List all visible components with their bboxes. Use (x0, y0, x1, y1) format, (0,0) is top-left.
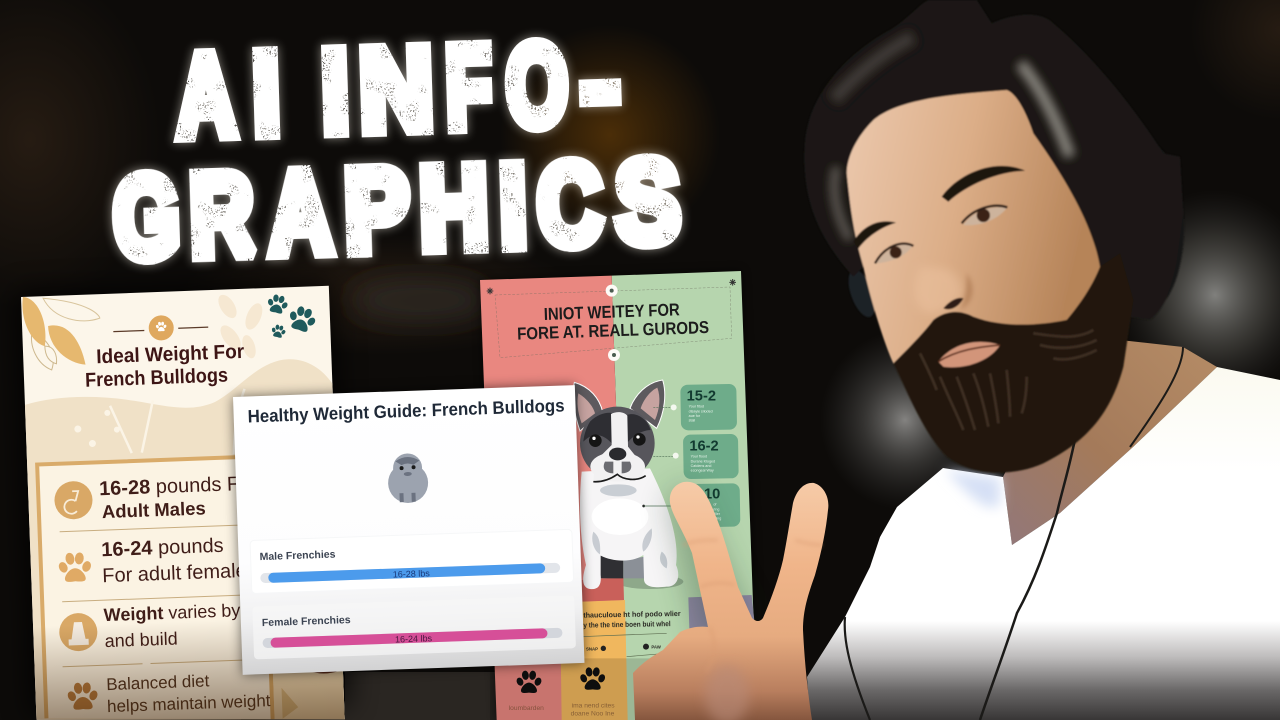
headline line 1: O (504, 20, 570, 152)
faint leaves top right (214, 290, 268, 361)
headline line 2: H (418, 142, 490, 274)
range bar: female (262, 628, 563, 649)
headline (112, 18, 682, 283)
range bar: female: 16-24 lbs (395, 633, 433, 644)
weight callout 1: stall (689, 419, 695, 423)
chest markings (600, 484, 637, 496)
title: Ideal Weight For (96, 341, 245, 368)
headline line 2: I (498, 141, 528, 271)
headline line 2: S (614, 136, 682, 268)
headline line 1: F (444, 22, 493, 153)
poster background (15, 279, 350, 717)
fact: weight varies: Weight varies by 4 (103, 600, 256, 625)
face (847, 90, 1100, 367)
fact: balanced diet: Balanced diet (106, 671, 210, 694)
purple tab (688, 595, 755, 628)
description text (580, 609, 681, 657)
neck (1003, 340, 1217, 545)
finger joints and knuckle shading (683, 540, 822, 672)
title (84, 341, 246, 392)
header icon with rules (113, 314, 209, 342)
green half (612, 271, 760, 720)
eyes (877, 245, 912, 263)
ears (573, 382, 603, 431)
side panel (273, 663, 345, 720)
card: healthy weight guide (233, 385, 584, 675)
fact: adult males: 16-28 pounds For (99, 472, 258, 500)
paw icons (515, 667, 606, 693)
weight callout 1: disayie siloded (689, 409, 713, 413)
presenter (804, 0, 1280, 720)
weight callout 1: Your fitod (689, 405, 704, 409)
headline line 2: A (267, 146, 334, 278)
right headphone cup (1109, 142, 1184, 312)
fact: adult females: 16-24 pounds (101, 535, 224, 561)
headline line 1: I (320, 26, 351, 156)
label: female: Female Frenchies (262, 614, 351, 629)
headline line 2: P (343, 145, 411, 276)
headline line 2 (112, 135, 682, 283)
weight callout 3: of (713, 503, 717, 507)
description text: SNAP (586, 646, 598, 651)
weight callout 2: Durane Kloged (691, 459, 715, 463)
hair highlights (833, 37, 1070, 240)
beard hair texture (920, 330, 1097, 430)
beige wave background (24, 358, 345, 720)
hair (804, 0, 1183, 320)
nose and mouth (609, 448, 626, 460)
headline line 1 (175, 18, 621, 162)
left headphone cup (843, 266, 880, 320)
weight callout 1: 15-2 (687, 388, 716, 404)
weight callout 1: aue for (689, 414, 701, 418)
icon: simple dog (387, 453, 429, 504)
bottom small text: ima nend cites (572, 703, 615, 710)
fact: weight varies: and build (104, 628, 178, 651)
title: INIOT WEITEY FOR (543, 299, 680, 324)
title: French Bulldogs (85, 364, 228, 392)
title: FORE AT. REALL GURODS (517, 317, 709, 344)
beard (893, 253, 1133, 473)
headline line 1: N (358, 24, 435, 156)
leaves top left (22, 294, 102, 371)
label: male: Male Frenchies (259, 549, 336, 563)
ornament badges (606, 285, 620, 361)
finger shadow (665, 480, 755, 650)
shirt blue tint (945, 470, 1000, 507)
weight callout 1 (653, 384, 737, 430)
weight callout 3: ring (713, 507, 719, 511)
weight callout 3: ming (713, 517, 721, 521)
headline line 2: C (535, 138, 604, 270)
headline line 2: R (188, 149, 256, 280)
headline line 1: I (251, 28, 282, 159)
weight callout 3: tiller (713, 512, 721, 516)
card heading: Healthy Weight Guide: French Bulldogs (247, 395, 565, 426)
corner stars (487, 279, 736, 294)
bottom shading (33, 615, 345, 720)
nose (914, 267, 963, 314)
panel: female range (252, 595, 576, 659)
description text: y the the tine boen buit whel (583, 619, 671, 630)
weight callout 3: 10 (704, 486, 720, 502)
headline line 1: - (579, 18, 621, 149)
lips (938, 342, 1000, 367)
head (804, 0, 1184, 473)
earphone cables (1130, 347, 1183, 447)
panel: weight facts (37, 456, 273, 720)
red half (480, 276, 627, 720)
headline line 2: G (112, 151, 181, 283)
fact: weight varies (58, 600, 260, 667)
description text: thauculoue ht hof podo wlier (583, 609, 681, 620)
eyes (589, 434, 602, 447)
orange column (560, 600, 628, 720)
card surface (233, 385, 584, 675)
description text: PAW (651, 644, 662, 649)
decorative branches (73, 389, 247, 460)
weight callout 2: econgeal Way (691, 469, 714, 473)
poster: ideal weight for French bulldogs (15, 279, 351, 720)
fact: balanced diet (66, 669, 271, 718)
weight callout 2: Your flood (691, 455, 707, 459)
panel: male range (250, 529, 574, 593)
fact: adult males: Adult Males (102, 497, 206, 522)
shirt (807, 367, 1280, 720)
fact: adult females (56, 534, 252, 602)
palm and fingers (633, 482, 828, 720)
ground (617, 574, 683, 589)
poster shadow (480, 271, 760, 720)
range bar: male (260, 563, 560, 584)
eyebrows (853, 221, 896, 248)
range bar: male: 16-28 lbs (393, 568, 430, 580)
headline line 1: A (175, 30, 237, 161)
weight callout 2 (653, 434, 739, 479)
weight callout 3 (642, 483, 740, 527)
hand: peace sign (633, 480, 828, 720)
fact: adult males (54, 472, 259, 532)
teal paw prints (264, 291, 321, 340)
weight callout 2: Catdens and (691, 464, 711, 468)
fact: adult females: For adult female (102, 560, 247, 587)
French bulldog illustration (573, 380, 683, 602)
body (580, 468, 678, 589)
bottom small text: Ioumbarden (508, 705, 544, 712)
poster: colourful French bulldog weight chart (480, 271, 760, 720)
fact: balanced diet: helps maintain weight (107, 691, 271, 716)
bottom small text: doane Noo Ine (571, 711, 615, 718)
torso and white shirt (807, 340, 1280, 720)
weight callout 2: 16-2 (689, 438, 719, 454)
bottom small text (508, 703, 615, 718)
head (580, 407, 655, 480)
title (517, 299, 709, 344)
dashed title frame (495, 287, 732, 358)
bottom shading (490, 658, 760, 720)
